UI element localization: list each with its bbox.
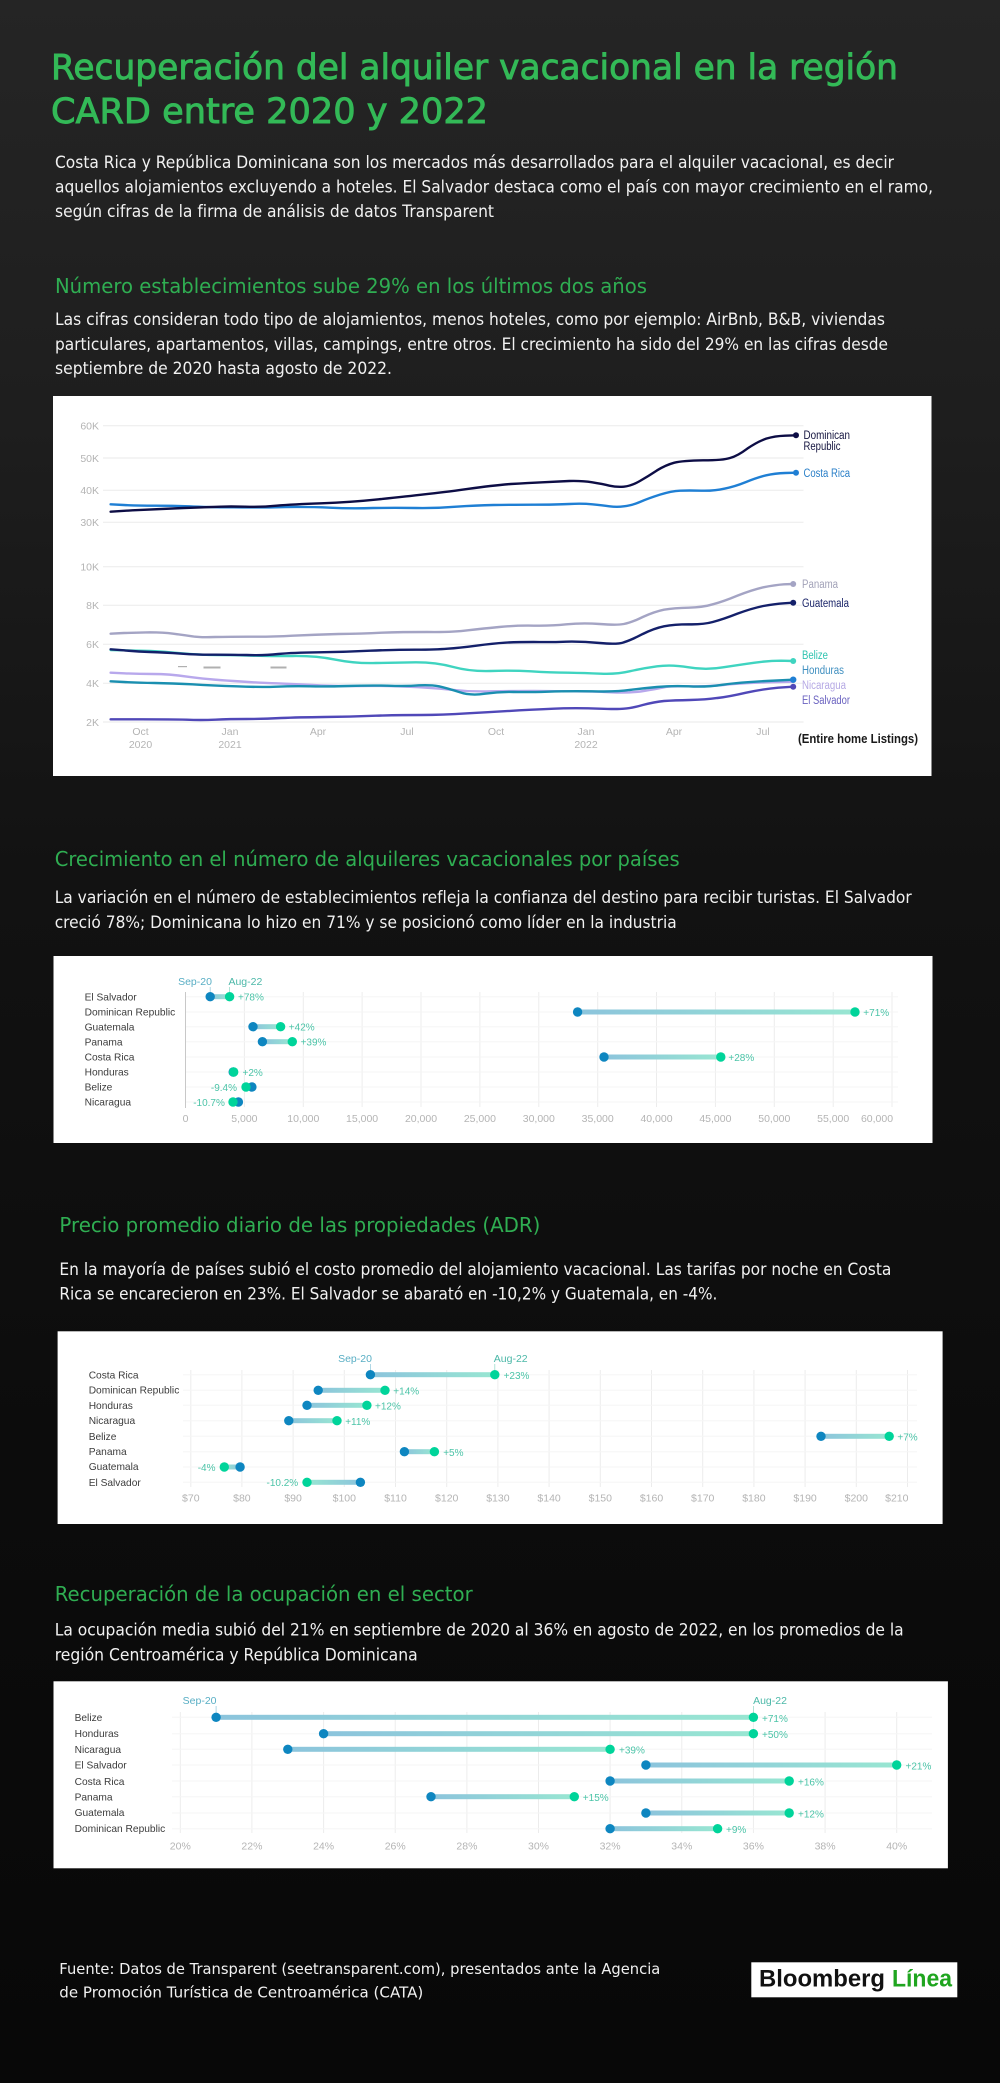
axis labels: 28% <box>456 1840 477 1852</box>
axis labels: $180 <box>742 1493 766 1505</box>
axis labels: $100 <box>333 1493 356 1505</box>
x axis labels: 2020 <box>129 739 152 751</box>
intro paragraph <box>55 153 933 221</box>
heading: growth by country: Crecimiento en el número de alquileres vacacionales por países <box>55 847 680 871</box>
paragraph: growth by country: creció 78%; Dominicana lo hizo en 71% y se posicionó como líder en la industria <box>55 913 677 932</box>
paragraph: ADR: En la mayoría de países subió el costo promedio del alojamiento vacacional. Las tarifas por noche en Costa <box>59 1260 891 1279</box>
x axis labels: Jul <box>756 726 770 738</box>
axis labels: 10,000 <box>287 1113 320 1125</box>
dumbbells: +21% <box>906 1761 931 1772</box>
x axis labels: Oct <box>488 726 504 738</box>
paragraph: growth by country: La variación en el número de establecimientos refleja la confianza del destino para recibir turistas. El Salvador <box>55 888 912 907</box>
country labels: Honduras <box>75 1729 119 1740</box>
country labels: Guatemala <box>75 1808 125 1819</box>
series labels: El Salvador <box>802 695 850 707</box>
x axis labels <box>129 726 770 751</box>
dumbbells: +15% <box>583 1793 609 1804</box>
axis labels: 30,000 <box>523 1113 555 1125</box>
axis labels: 20% <box>170 1840 191 1852</box>
axis labels: $170 <box>691 1493 715 1505</box>
dumbbells: +28% <box>728 1053 754 1064</box>
axis labels <box>183 1113 893 1125</box>
axis labels: 32% <box>600 1840 621 1852</box>
dumbbells: +50% <box>762 1730 788 1741</box>
y axis labels: 40K <box>80 485 99 497</box>
country labels: El Salvador <box>85 992 137 1004</box>
series labels: Belize <box>802 650 828 662</box>
dumbbells <box>198 1370 918 1489</box>
x axis labels: Apr <box>310 726 327 738</box>
x axis labels: 2022 <box>574 739 598 751</box>
intro paragraph: Costa Rica y República Dominicana son los mercados más desarrollados para el alquiler vacacional, es decir <box>55 153 894 172</box>
small smudges <box>178 666 286 668</box>
country labels: Guatemala <box>89 1462 139 1473</box>
heading: ADR: Precio promedio diario de las propiedades (ADR) <box>59 1213 540 1237</box>
axis labels: $80 <box>233 1493 251 1505</box>
dumbbells: -10.7% <box>193 1098 225 1109</box>
country labels: Costa Rica <box>75 1777 125 1788</box>
heading: occupancy: Recuperación de la ocupación en el sector <box>55 1582 473 1606</box>
country labels: Dominican Republic <box>75 1824 165 1835</box>
series labels: Guatemala <box>802 598 849 610</box>
paragraph: establishments: particulares, apartamentos, villas, campings, entre otros. El crecimiento ha sido del 29% en las cifras desde <box>55 335 888 354</box>
axis labels <box>182 1493 909 1505</box>
dumbbells: +23% <box>504 1371 530 1382</box>
axis labels: 45,000 <box>699 1113 732 1125</box>
axis labels: $70 <box>182 1493 200 1505</box>
series labels: Panama <box>802 579 838 591</box>
country labels: Dominican Republic <box>85 1008 175 1018</box>
y axis labels: 10K <box>80 562 99 574</box>
axis labels: 25,000 <box>464 1113 496 1125</box>
dumbbells: +12% <box>375 1402 401 1412</box>
intro paragraph: aquellos alojamientos excluyendo a hoteles. El Salvador destaca como el país con mayor crecimiento en el ramo, <box>55 178 933 196</box>
country labels: Panama <box>75 1792 113 1804</box>
paragraph: establishments: septiembre de 2020 hasta agosto de 2022. <box>55 359 392 378</box>
dumbbells: +9% <box>726 1825 746 1836</box>
paragraph: growth by country <box>55 888 912 932</box>
country labels: Honduras <box>85 1068 129 1078</box>
country labels: El Salvador <box>75 1760 127 1772</box>
dumbbells: +71% <box>762 1714 788 1725</box>
dumbbells: -4% <box>198 1463 216 1474</box>
series end dots <box>790 432 799 690</box>
title <box>51 48 898 132</box>
axis labels: $200 <box>845 1493 868 1505</box>
panel: dumbbell chart occupancy <box>54 1681 948 1868</box>
series lines <box>111 435 796 720</box>
axis labels: $90 <box>284 1493 302 1505</box>
country labels: Dominican Republic <box>89 1386 179 1396</box>
country labels <box>89 1370 179 1489</box>
axis labels: 5,000 <box>231 1113 258 1125</box>
date markers: Sep-20 <box>338 1353 372 1365</box>
y axis labels: 30K <box>80 517 99 529</box>
country labels: Panama <box>85 1038 123 1048</box>
dumbbells <box>211 1713 931 1836</box>
axis labels <box>170 1840 907 1852</box>
axis labels: 55,000 <box>817 1113 849 1125</box>
axis labels: $120 <box>435 1493 459 1505</box>
axis labels: 40% <box>886 1840 907 1852</box>
dumbbells: +39% <box>619 1745 645 1756</box>
dumbbells: -9.4% <box>211 1083 237 1094</box>
country labels: Belize <box>89 1432 117 1443</box>
logo: Bloomberg Línea: Línea <box>892 1966 953 1992</box>
axis labels: $150 <box>589 1493 612 1505</box>
dumbbells: +42% <box>289 1022 315 1034</box>
country labels: Guatemala <box>85 1022 135 1034</box>
series labels: Nicaragua <box>802 680 847 692</box>
y axis labels: 6K <box>86 639 99 651</box>
date markers: Aug-22 <box>494 1353 528 1365</box>
paragraph: occupancy: La ocupación media subió del 21% en septiembre de 2020 al 36% en agosto de 2022, en los promedios de la <box>55 1621 904 1640</box>
x axis labels: Jan <box>578 726 595 738</box>
axis labels: 36% <box>743 1840 764 1852</box>
date markers: Sep-20 <box>178 976 212 988</box>
country labels <box>85 992 175 1108</box>
country labels: Nicaragua <box>85 1098 131 1108</box>
dumbbells: +14% <box>393 1386 419 1398</box>
date markers <box>338 1353 528 1374</box>
dumbbells: +71% <box>863 1008 889 1019</box>
axis labels: 22% <box>241 1840 262 1852</box>
title: Recuperación del alquiler vacacional en la región <box>51 48 898 88</box>
dumbbells: +5% <box>443 1448 464 1459</box>
axis labels: 60,000 <box>861 1113 893 1125</box>
axis labels: $160 <box>640 1493 663 1505</box>
axis labels: 30% <box>528 1840 549 1852</box>
axis labels: $130 <box>486 1493 510 1505</box>
dumbbells: +11% <box>345 1417 370 1428</box>
axis labels: $190 <box>793 1493 817 1505</box>
panel: dumbbell chart ADR <box>58 1331 943 1524</box>
dumbbells: +7% <box>897 1432 918 1443</box>
date markers: Sep-20 <box>183 1695 217 1707</box>
country labels: Belize <box>75 1713 103 1724</box>
country labels: Nicaragua <box>89 1416 135 1427</box>
source note: Fuente: Datos de Transparent (seetransparent.com), presentados ante la Agencia <box>59 1960 660 1978</box>
series labels: Republic <box>804 441 841 453</box>
country labels: Nicaragua <box>75 1745 121 1756</box>
axis labels: 50,000 <box>758 1113 791 1125</box>
title: CARD entre 2020 y 2022 <box>51 92 488 132</box>
country labels <box>75 1713 165 1835</box>
y axis labels: 60K <box>80 420 99 432</box>
axis labels: 26% <box>385 1840 406 1852</box>
series labels <box>802 430 850 707</box>
axis labels: 15,000 <box>346 1113 378 1125</box>
chart note: (Entire home Listings) <box>798 732 918 746</box>
panel: line chart of listings <box>53 396 932 776</box>
y axis labels: 4K <box>86 678 99 690</box>
heading: establishments: Número establecimientos sube 29% en los últimos dos años <box>55 274 647 298</box>
axis labels: 24% <box>313 1840 334 1852</box>
x axis labels: Oct <box>132 726 149 738</box>
paragraph: ADR: Rica se encarecieron en 23%. El Salvador se abarató en -10,2% y Guatemala, en -4%. <box>59 1284 717 1303</box>
axis labels: $140 <box>537 1493 561 1505</box>
dumbbells: +16% <box>798 1777 824 1788</box>
dumbbells: +2% <box>242 1068 263 1079</box>
dumbbells: +78% <box>238 992 264 1004</box>
axis labels: $210 <box>885 1493 909 1505</box>
paragraph: occupancy <box>55 1621 904 1664</box>
series labels: Dominican <box>804 430 850 442</box>
date markers: Aug-22 <box>228 976 262 988</box>
axis labels: 0 <box>183 1113 189 1125</box>
axis labels: 40,000 <box>640 1113 673 1125</box>
y axis labels: 8K <box>86 600 99 612</box>
x axis labels: 2021 <box>218 739 242 751</box>
country labels: Belize <box>85 1082 113 1094</box>
country labels: Honduras <box>89 1401 133 1412</box>
date markers <box>178 976 262 996</box>
y axis labels: 2K <box>86 717 99 729</box>
country labels: Costa Rica <box>85 1052 135 1064</box>
country labels: Panama <box>89 1447 127 1458</box>
country labels: El Salvador <box>89 1478 141 1489</box>
dumbbells <box>193 992 889 1109</box>
x axis labels: Jan <box>222 726 239 738</box>
axis labels: 35,000 <box>582 1113 614 1125</box>
dumbbells: +39% <box>301 1038 327 1048</box>
y axis labels <box>80 420 99 729</box>
intro paragraph: según cifras de la firma de análisis de datos Transparent <box>55 202 494 221</box>
series labels: Honduras <box>802 665 844 677</box>
y axis labels: 50K <box>80 453 99 465</box>
panel: dumbbell chart listings by country <box>54 956 932 1143</box>
axis labels: 20,000 <box>405 1113 437 1125</box>
paragraph: establishments <box>55 310 888 378</box>
date markers <box>183 1695 787 1716</box>
x axis labels: Apr <box>666 726 683 738</box>
dumbbells: +12% <box>798 1809 824 1820</box>
axis labels: $110 <box>384 1493 407 1505</box>
x axis labels: Jul <box>400 726 414 738</box>
paragraph: ADR <box>59 1260 891 1303</box>
dumbbells: -10.2% <box>267 1478 298 1489</box>
paragraph: occupancy: región Centroamérica y República Dominicana <box>55 1645 418 1664</box>
axis labels: 34% <box>671 1840 692 1852</box>
logo: Bloomberg Línea <box>751 1962 957 1997</box>
axis labels: 38% <box>815 1840 836 1852</box>
logo: Bloomberg Línea: Bloomberg <box>759 1966 885 1992</box>
date markers: Aug-22 <box>753 1695 787 1707</box>
paragraph: establishments: Las cifras consideran todo tipo de alojamientos, menos hoteles, como por ejemplo: AirBnb, B&B, viviendas <box>55 310 885 329</box>
source note: de Promoción Turística de Centroamérica (CATA) <box>59 1984 423 2002</box>
series labels: Costa Rica <box>804 468 850 480</box>
source note <box>59 1960 660 2002</box>
country labels: Costa Rica <box>89 1370 139 1382</box>
